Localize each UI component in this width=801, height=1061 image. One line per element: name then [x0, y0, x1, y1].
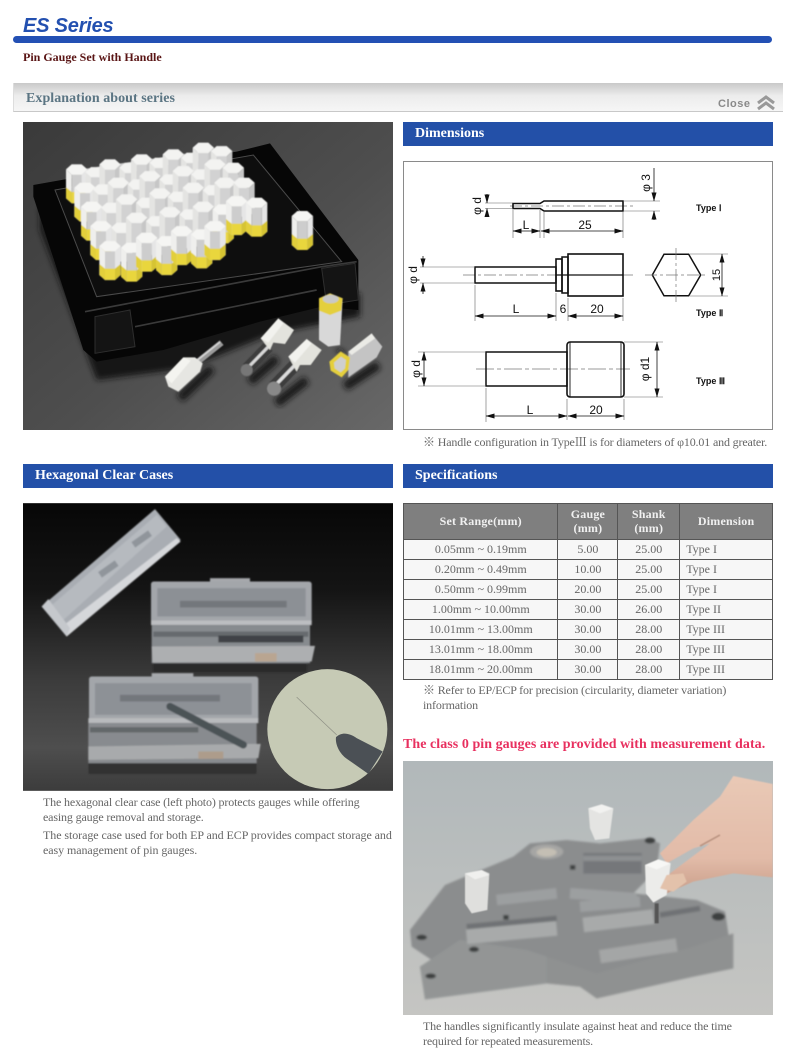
valve photo caption: The handles significantly insulate against heat and reduce the time required for repeated measurements. [423, 1019, 732, 1048]
clear case caption: The hexagonal clear case (left photo) protects gauges while offering [43, 795, 359, 809]
specifications table: 5.00 [577, 542, 598, 556]
diagram: type I: L [523, 218, 530, 232]
photo: pin gauge set in tray [23, 122, 393, 430]
closed case [42, 509, 181, 636]
specifications table: 25.00 [635, 542, 662, 556]
tray shadow [40, 207, 360, 380]
specifications table: 28.00 [635, 662, 662, 676]
specifications table: 10.00 [574, 562, 601, 576]
close control [718, 95, 775, 110]
diagram: type III: φ d [409, 360, 423, 378]
specifications table: 10.01mm ~ 13.00mm [429, 622, 533, 636]
loose gauges [165, 293, 382, 403]
title: ES Series: ES Series [23, 15, 114, 37]
table note: ※ Refer to EP/ECP for precision (circularity, diameter variation) information [423, 683, 726, 712]
specifications table [403, 503, 773, 680]
photo: gauges used on valve body [403, 761, 773, 1015]
hexagonal gauges in rows [66, 143, 313, 282]
specifications table: (mm) [634, 520, 663, 534]
specifications table: 30.00 [574, 622, 601, 636]
header: dimensions: Dimensions [415, 126, 484, 141]
diagram: type III: Type Ⅲ [696, 376, 725, 386]
diagram: type I [470, 168, 722, 238]
specifications table: (mm) [574, 520, 602, 534]
specifications table: 28.00 [635, 622, 662, 636]
close control: Close [718, 98, 750, 110]
specifications table: Type I [686, 582, 717, 596]
specifications table: Type I [686, 562, 717, 576]
specifications table: 0.20mm ~ 0.49mm [435, 562, 527, 576]
header: specifications: Specifications [415, 468, 497, 483]
header: specifications [403, 464, 773, 488]
specifications table: 30.00 [574, 602, 601, 616]
diagram: type I: Type Ⅰ [696, 203, 722, 213]
dimensions note: ※ Handle configuration in TypeⅢ is for diameters of φ10.01 and greater. [423, 435, 767, 449]
diagram: type II: 15 [711, 269, 723, 281]
specifications table: 30.00 [574, 662, 601, 676]
dimensions diagram [403, 161, 773, 430]
specifications table: Set Range(mm) [440, 514, 522, 528]
specifications table: Type I [686, 542, 717, 556]
specifications table: Dimension [698, 514, 754, 528]
diagram: type III: φ d1 [638, 356, 652, 381]
specifications table: Type III [686, 642, 725, 656]
diagram: type II: L [513, 302, 520, 316]
open case, lower [88, 673, 261, 774]
clear case caption [43, 795, 392, 857]
title underline bar [13, 36, 772, 43]
specifications table: 20.00 [574, 582, 601, 596]
header: dimensions [403, 122, 773, 146]
clear case caption: easing gauge removal and storage. [43, 810, 204, 824]
specifications table: Type III [686, 622, 725, 636]
diagram: type I: φ d [470, 197, 484, 215]
callout: class 0 measurement data: The class 0 pin gauges are provided with measurement data. [403, 737, 765, 752]
specifications table: Gauge [571, 506, 605, 520]
subtitle: Pin Gauge Set with Handle [23, 50, 162, 64]
specifications table: 25.00 [635, 582, 662, 596]
section header: explanation about series [13, 83, 783, 112]
header: hexagonal clear cases [23, 464, 393, 488]
specifications table: 0.50mm ~ 0.99mm [435, 582, 527, 596]
valve body [410, 838, 733, 999]
diagram: type II: Type Ⅱ [696, 308, 723, 318]
specifications table: 13.01mm ~ 18.00mm [429, 642, 533, 656]
diagram: type III: L [527, 403, 534, 417]
specifications table: 18.01mm ~ 20.00mm [429, 662, 533, 676]
diagram: type I: φ 3 [639, 174, 653, 192]
specifications table: 28.00 [635, 642, 662, 656]
open case, upper [151, 578, 315, 672]
inset circle: gauge tip [267, 669, 387, 789]
photo: hexagonal clear cases [23, 503, 393, 791]
header: hexagonal clear cases: Hexagonal Clear Cases [35, 468, 173, 483]
gauge handles on valve [465, 804, 657, 923]
specifications table: 26.00 [635, 602, 662, 616]
specifications table: 25.00 [635, 562, 662, 576]
diagram: type III: 20 [589, 403, 603, 417]
diagram: type III [409, 342, 725, 422]
specifications table: 30.00 [574, 642, 601, 656]
clear case caption: easy management of pin gauges. [43, 843, 197, 857]
clear case caption: The storage case used for both EP and ECP provides compact storage and [43, 828, 392, 842]
section heading text: Explanation about series [26, 91, 175, 106]
specifications table: Type III [686, 662, 725, 676]
diagram: type II [406, 248, 728, 321]
specifications table: 0.05mm ~ 0.19mm [435, 542, 527, 556]
diagram: type II: 6 [560, 302, 567, 316]
specifications table: Type II [686, 602, 721, 616]
diagram: type I: 25 [578, 218, 592, 232]
specifications table: 1.00mm ~ 10.00mm [432, 602, 530, 616]
hand holding gauge [645, 776, 773, 903]
diagram: type II: 20 [590, 302, 604, 316]
diagram: type II: φ d [406, 266, 420, 284]
specifications table: Shank [632, 506, 666, 520]
